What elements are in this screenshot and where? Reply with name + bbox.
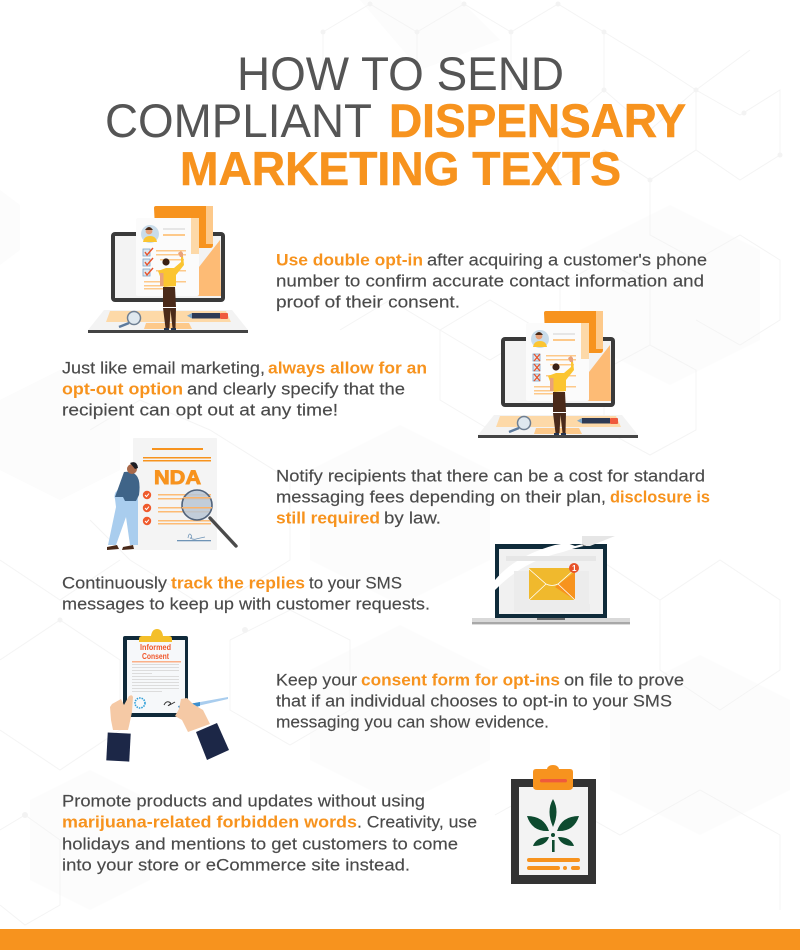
text: disclosure — [276, 468, 710, 528]
text: consent form — [276, 672, 684, 732]
title: COMPLIANT — [105, 94, 372, 147]
text: track the replies: Continuously — [62, 574, 168, 592]
text: forbidden words: . Creativity, use — [357, 814, 477, 832]
icon: laptop with checklist 1 — [88, 206, 248, 333]
icon: laptop with email: 1 — [572, 564, 577, 573]
text: consent form: that if an individual chooses to opt-in to your SMS — [276, 692, 672, 710]
icon: informed consent clipboard with hands: Consent — [142, 652, 169, 661]
text: opt-out option — [62, 360, 427, 420]
text: disclosure: disclosure is — [610, 488, 710, 506]
text: double opt-in: Use double opt-in — [276, 252, 423, 270]
icon: NDA document with magnifier: NDA — [154, 468, 201, 489]
text: double opt-in: after acquiring a customer's phone — [427, 252, 707, 270]
text: double opt-in: number to confirm accurate contact information and — [276, 272, 704, 290]
text: consent form: Keep your — [276, 672, 358, 690]
icon: cannabis clipboard — [511, 765, 596, 884]
text: disclosure: still required — [276, 510, 380, 528]
text: forbidden words — [62, 792, 477, 874]
text: forbidden words: marijuana-related forbidden words — [62, 814, 357, 832]
text: opt-out option: always allow for an — [268, 360, 427, 378]
icon: informed consent clipboard with hands — [106, 629, 229, 762]
icon: NDA document with magnifier — [107, 438, 236, 550]
icon: informed consent clipboard with hands: Informed — [140, 643, 171, 652]
text: track the replies: to your SMS — [309, 574, 402, 592]
text: disclosure: Notify recipients that there can be a cost for standard — [276, 468, 705, 486]
text: opt-out option: Just like email marketing, — [62, 360, 265, 378]
text: forbidden words: Promote products and updates without using — [62, 792, 425, 810]
text: disclosure: messaging fees depending on their plan, — [276, 488, 606, 506]
text: double opt-in — [276, 252, 707, 312]
icon: laptop with email — [472, 536, 630, 624]
title: DISPENSARY — [389, 94, 686, 147]
text: consent form: on file to prove — [564, 672, 684, 690]
text: consent form: messaging you can show evidence. — [276, 714, 549, 732]
title: MARKETING TEXTS — [180, 142, 621, 195]
text: disclosure: by law. — [384, 510, 441, 528]
text: consent form: consent form for opt-ins — [361, 672, 560, 690]
text: opt-out option: and clearly specify that the — [187, 380, 405, 398]
footer bar — [0, 929, 800, 950]
text: track the replies: messages to keep up with customer requests. — [62, 596, 430, 614]
text: forbidden words: into your store or eCommerce site instead. — [62, 856, 410, 874]
title: HOW TO SEND — [237, 47, 564, 100]
text: track the replies — [62, 574, 430, 614]
text: opt-out option: recipient can opt out at any time! — [62, 402, 338, 420]
text: track the replies: track the replies — [171, 574, 305, 592]
text: forbidden words: holidays and mentions to get customers to come — [62, 836, 458, 854]
title — [105, 47, 686, 195]
text: opt-out option: opt-out option — [62, 380, 183, 398]
text: double opt-in: proof of their consent. — [276, 294, 460, 312]
icon: laptop with checklist 2 — [478, 311, 638, 438]
